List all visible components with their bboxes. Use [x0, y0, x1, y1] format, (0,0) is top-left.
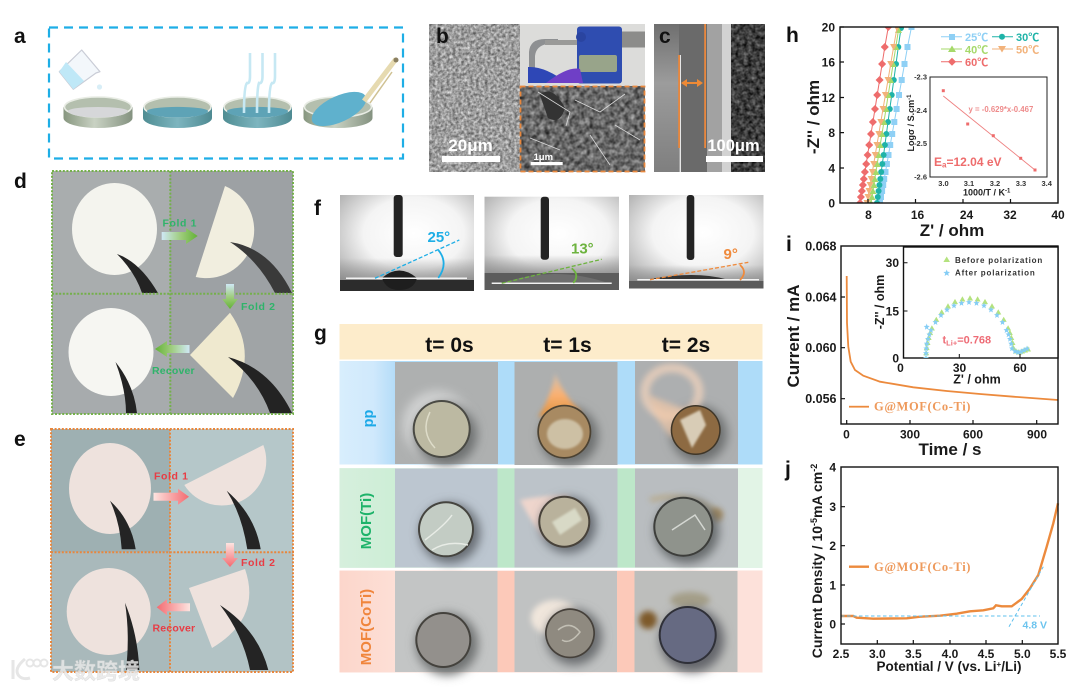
Arrhenius inset plot: -2.5	[914, 139, 927, 148]
axis title Z prime: Z' / ohm	[920, 221, 984, 240]
Arrhenius inset plot: -1	[1005, 188, 1011, 194]
impedance inset: 0	[897, 361, 904, 375]
Arrhenius inset plot: Logσ / S.cm	[906, 100, 916, 152]
watermark logo	[13, 659, 48, 679]
text: recover red: Recover	[152, 622, 195, 634]
arrow: recover red	[157, 599, 190, 615]
axis title Z double prime: -Z'' / ohm	[804, 80, 823, 154]
axis numbers j: 2.5	[833, 647, 850, 661]
icon: beaker pouring	[59, 50, 102, 90]
Arrhenius inset plot: -2.6	[914, 172, 927, 182]
axis numbers i: 0.068	[805, 240, 837, 254]
Nyquist axis numbers: 8	[828, 126, 835, 140]
arrow: fold 2 red	[222, 543, 238, 567]
row label MOF(CoTi): MOF(CoTi)	[358, 589, 375, 665]
axis numbers i: 0	[843, 428, 850, 442]
axis numbers j: 4.5	[978, 647, 995, 661]
axis title current density: Current Density / 10	[809, 526, 825, 658]
axis numbers j: 2	[829, 539, 836, 553]
main axes i	[841, 246, 1058, 424]
row label pp: pp	[361, 410, 377, 427]
axis numbers j: 3.5	[905, 647, 922, 661]
Arrhenius inset plot: -1	[907, 94, 913, 100]
contact angle 25 degrees: 25°	[428, 229, 450, 246]
row label MOF(Ti): MOF(Ti)	[358, 493, 375, 549]
photo PP 2s with flame	[635, 361, 738, 464]
header row: t= 2s	[662, 334, 710, 357]
panel h: Nyquist plot	[786, 20, 1065, 240]
axis numbers j	[829, 460, 1067, 661]
impedance inset: 30	[953, 361, 966, 375]
Arrhenius inset plot: 3.4	[1041, 179, 1053, 188]
axis numbers i: 600	[963, 428, 983, 442]
temperature legend: 60℃	[965, 57, 988, 69]
row backgrounds	[340, 361, 762, 672]
label j: j	[784, 458, 791, 481]
temperature legend: 25℃	[965, 32, 988, 44]
header row: t= 1s	[543, 334, 592, 357]
temperature legend	[941, 32, 1039, 69]
scale bar 20 um: 20μm	[448, 136, 493, 155]
label g: g	[314, 322, 327, 345]
axis numbers j: 4.0	[942, 647, 959, 661]
axis numbers i: 300	[900, 428, 920, 442]
impedance inset: 0	[892, 352, 899, 366]
legend i: G@MOF(Co-Ti)	[874, 400, 971, 414]
contact angle 13 degrees	[484, 197, 619, 290]
Nyquist axis numbers: 4	[828, 162, 835, 176]
text: fold 2 red: Fold 2	[241, 557, 276, 569]
axis title current density: mA cm	[809, 472, 825, 518]
text: fold 2 green: Fold 2	[241, 301, 276, 313]
icon: empty dish	[64, 97, 132, 128]
photo MOF(Ti) 0s	[395, 468, 498, 568]
Arrhenius inset plot: 1000/T / K	[963, 188, 1005, 198]
Nyquist axis numbers	[822, 20, 1065, 222]
Arrhenius inset plot: -2.4	[914, 106, 928, 115]
icon: evaporating dish	[223, 53, 292, 128]
panel j: linear sweep voltammetry	[784, 458, 1067, 674]
membrane shapes e	[67, 443, 266, 655]
header row: t= 0s	[425, 334, 474, 357]
impedance inset: Z' / ohm	[953, 372, 1001, 386]
Arrhenius inset plot	[906, 72, 1053, 198]
Nyquist axis numbers: 40	[1051, 208, 1065, 222]
panel f: contact angle	[314, 195, 764, 291]
dashed frame a	[49, 28, 403, 158]
Nyquist axis numbers: 24	[960, 208, 973, 222]
axis numbers i: 0.056	[805, 392, 837, 406]
contact angle 9 degrees	[629, 195, 764, 288]
temperature legend: 30℃	[1016, 32, 1039, 44]
watermark	[13, 654, 140, 686]
label a: a	[14, 25, 26, 48]
current decay curve	[847, 276, 1058, 400]
Arrhenius inset plot: E	[934, 155, 942, 169]
axis title time: Time / s	[918, 440, 982, 459]
arrow: recover green	[155, 341, 190, 357]
impedance inset: =0.768	[957, 334, 991, 346]
axis numbers j: 3	[829, 500, 836, 514]
label h: h	[786, 24, 799, 47]
panel d: white membrane folding	[14, 170, 294, 414]
label e: e	[14, 428, 26, 451]
Nyquist axis numbers: 20	[822, 20, 835, 34]
temperature legend: 50℃	[1016, 44, 1039, 56]
dotted grid e	[51, 429, 294, 672]
axis numbers i: 900	[1027, 428, 1047, 442]
impedance inset	[873, 247, 1058, 386]
Nyquist axis numbers: 16	[911, 208, 924, 222]
impedance inset: 30	[886, 256, 899, 270]
photo MOF(CoTi) 2s	[634, 571, 738, 672]
axes j	[841, 467, 1058, 644]
onset annotation: 4.8 V	[1022, 620, 1047, 632]
photo MOF(Ti) 2s	[635, 468, 738, 568]
photo MOF(CoTi) 0s	[395, 571, 498, 675]
panel c: cross-section SEM	[654, 24, 765, 172]
impedance inset: Before polarization	[955, 256, 1043, 265]
axis title current density: -5	[809, 518, 819, 526]
axis numbers j: 5.5	[1050, 647, 1067, 661]
tweezers d	[116, 242, 292, 413]
photo background d	[52, 171, 293, 414]
SEM inset image	[520, 86, 645, 172]
impedance inset: Li+	[946, 338, 958, 348]
micrometer photo	[520, 24, 645, 86]
impedance inset: 15	[886, 304, 899, 318]
Arrhenius inset plot: 3.1	[964, 179, 974, 188]
contact angle 9 degrees: 9°	[724, 246, 738, 263]
Nyquist axis numbers: 16	[822, 56, 835, 70]
Nyquist axis numbers: 8	[865, 208, 872, 222]
legend j: G@MOF(Co-Ti)	[874, 560, 971, 574]
panel a: fabrication process	[14, 25, 403, 158]
Nyquist axis numbers: 0	[828, 196, 835, 210]
label f: f	[314, 197, 322, 220]
Nyquist axis numbers: 32	[1003, 208, 1017, 222]
temperature legend: 40℃	[965, 44, 988, 56]
dotted grid d	[52, 171, 294, 414]
photo PP 1s with flame	[514, 362, 618, 465]
orange thickness guides and arrow	[678, 24, 706, 148]
photo MOF(Ti) 1s with flame	[514, 468, 618, 568]
contact angle 25 degrees	[340, 195, 474, 291]
axis numbers j: 3.0	[869, 647, 886, 661]
axis numbers j: 0	[829, 618, 836, 632]
arrow: fold 1 green	[162, 228, 198, 244]
axis numbers j: 1	[829, 578, 836, 592]
Arrhenius inset plot: 3.3	[1016, 179, 1026, 188]
Arrhenius inset plot: -2.3	[914, 72, 927, 82]
text: fold 1 red: Fold 1	[154, 470, 189, 482]
Arrhenius inset plot: 3.0	[938, 179, 949, 188]
photo background e	[51, 429, 293, 672]
panel g: flame test	[314, 322, 762, 675]
Arrhenius inset plot: y = -0.629*x-0.467	[968, 105, 1033, 114]
contact angle 13 degrees: 13°	[571, 240, 594, 258]
watermark text: 大数跨境	[52, 654, 140, 686]
Nyquist series curves	[860, 27, 912, 203]
arrow: fold 1 red	[154, 489, 189, 505]
axis numbers i: 0.064	[805, 290, 837, 304]
text: recover green: Recover	[152, 365, 195, 377]
panel b: SEM and micrometer	[429, 24, 645, 172]
impedance inset: After polarization	[955, 268, 1036, 278]
header row	[340, 324, 762, 360]
Nyquist axes and ticks	[840, 27, 1058, 203]
axis title current density: -2	[809, 464, 819, 472]
impedance inset: -Z'' / ohm	[873, 275, 887, 329]
cross-section image	[654, 24, 765, 172]
axis title current: Current / mA	[784, 285, 803, 387]
scale bar 100 um: 100μm	[707, 137, 760, 155]
label c: c	[659, 25, 671, 48]
scale bar 20 um	[442, 136, 500, 162]
SEM surface image	[429, 24, 521, 172]
axis numbers i	[805, 240, 1047, 442]
icon: dish with solution	[143, 97, 212, 128]
icon: peeling film from dish	[304, 58, 398, 133]
label i: i	[786, 233, 792, 256]
Arrhenius inset plot: 3.2	[990, 179, 1000, 188]
tweezers e	[110, 491, 268, 670]
tangent dashed guides	[841, 567, 1043, 627]
Nyquist axis numbers: 12	[822, 91, 835, 105]
axis title potential: /Li)	[1001, 659, 1021, 674]
axis numbers j: 5.0	[1014, 647, 1031, 661]
label d: d	[14, 170, 27, 193]
text: fold 1 green: Fold 1	[162, 218, 197, 230]
impedance inset: 60	[1013, 361, 1027, 375]
SEM inset image: 1μm	[534, 152, 553, 163]
axis numbers i: 0.060	[805, 341, 837, 355]
label b: b	[436, 25, 449, 48]
LSV curve	[841, 503, 1058, 619]
Arrhenius inset plot: =12.04 eV	[946, 155, 1002, 169]
axis numbers j: 4	[829, 460, 836, 474]
Arrhenius inset plot: a	[942, 160, 947, 170]
impedance inset: t	[942, 334, 946, 346]
photo PP 0s	[395, 362, 498, 465]
membrane shapes d	[68, 183, 254, 398]
panel i: chronoamperometry	[784, 233, 1058, 459]
scale bar 100 um	[706, 137, 763, 162]
panel e: pink membrane folding	[14, 428, 294, 672]
photo MOF(CoTi) 1s with flame	[514, 571, 617, 672]
axis title potential: +	[997, 660, 1002, 669]
arrow: fold 2 green	[222, 284, 238, 309]
axis title potential: Potential / V (vs. Li	[877, 659, 997, 674]
